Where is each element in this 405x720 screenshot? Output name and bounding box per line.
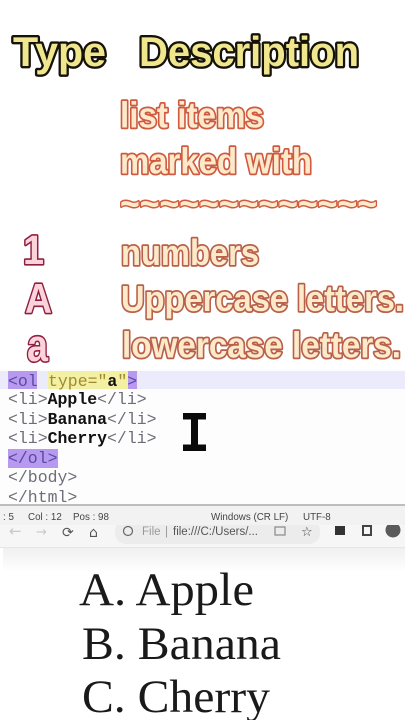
browser page background	[3, 548, 405, 572]
type key: A: A	[25, 275, 52, 322]
icon: info	[124, 526, 132, 536]
icon: share	[275, 527, 285, 535]
code lines: <ol	[8, 372, 38, 391]
status bar: Windows (CR LF)	[211, 512, 288, 523]
panel: code editor	[0, 369, 405, 507]
icon: back arrow: ←	[9, 522, 22, 540]
address text: File	[142, 526, 161, 538]
status bar: : 5	[3, 512, 14, 523]
rendered list output	[79, 564, 281, 720]
icon: text cursor	[183, 413, 206, 451]
icon: star: ☆	[301, 525, 313, 540]
heading: Description: Description	[139, 28, 359, 75]
rendered list output: A. Apple	[79, 564, 254, 616]
code lines: </html>	[8, 488, 77, 507]
heading: Type: Type	[13, 28, 106, 75]
icon: avatar	[386, 522, 400, 538]
icon: home: ⌂	[89, 525, 98, 541]
icon: forward arrow: →	[36, 525, 47, 540]
address text: file:///C:/Users/...	[173, 526, 258, 538]
status bar	[0, 504, 405, 525]
status bar: UTF-8	[303, 512, 331, 523]
code lines: <li>Banana</li>	[8, 410, 157, 429]
description: numbers: numbers	[121, 232, 259, 273]
description: list items marked with	[120, 94, 312, 182]
code lines: </body>	[8, 468, 77, 487]
rendered list output: B. Banana	[82, 618, 281, 670]
browser toolbar	[0, 520, 405, 548]
status bar: Col : 12	[28, 512, 62, 523]
icon: extensions	[335, 526, 345, 535]
code lines	[8, 372, 157, 507]
code lines: <li>Apple</li>	[8, 390, 147, 409]
status bar: Pos : 98	[73, 512, 109, 523]
description: list items marked with: marked with	[120, 140, 312, 182]
code lines: <li>Cherry</li>	[8, 429, 157, 448]
code lines: type="a">	[48, 372, 137, 391]
code lines: </ol>	[8, 449, 58, 468]
address text: |	[165, 526, 168, 538]
icon: side panel	[363, 526, 371, 535]
description: list items marked with: list items	[120, 94, 264, 136]
type key: a: a	[27, 320, 49, 371]
icon: reload: ⟳	[62, 525, 74, 541]
type key: 1: 1	[23, 227, 44, 273]
